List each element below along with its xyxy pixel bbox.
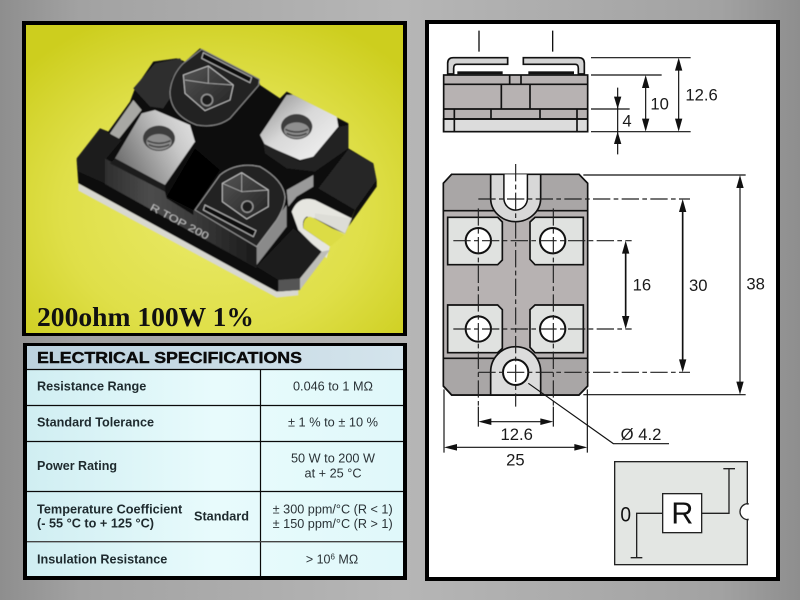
schematic symbol: 0 [620, 502, 631, 526]
terminal: right silver pad [260, 95, 338, 160]
row: temperature coefficient: ± 150 ppm/°C (R > 1) [273, 517, 393, 531]
terminal: bottom hexagon lug [195, 165, 285, 247]
row: insulation resistance: 6 [330, 552, 336, 561]
dimension: side view heights [591, 58, 691, 154]
product caption: 200ohm 100W 1% [37, 301, 254, 332]
row: temperature coefficient: Standard [194, 509, 249, 523]
dimension labels: side view [622, 85, 718, 131]
dimension: overall 38 [583, 175, 765, 395]
row: temperature coefficient: ± 300 ppm/°C (R < 1) [273, 502, 393, 516]
row: temperature coefficient [37, 502, 393, 531]
row: temperature coefficient: Temperature Coefficient [37, 502, 183, 516]
dimension labels: side view: 12.6 [685, 85, 718, 104]
schematic symbol: R [671, 496, 693, 530]
row: insulation resistance [37, 552, 358, 566]
dimension: hole diameter callout: Ø 4.2 [621, 425, 661, 444]
dimension: 12.6 width: 12.6 [500, 425, 533, 444]
drawing: side view [444, 31, 588, 132]
center lines [453, 164, 690, 407]
icon: resistor module photo [77, 48, 377, 298]
panel: mechanical drawing [425, 20, 780, 581]
row: power rating [37, 452, 375, 480]
row: standard tolerance: ± 1 % to ± 10 % [288, 416, 378, 430]
terminal: left silver pad [115, 110, 195, 185]
terminal pads [448, 217, 502, 265]
dimension: hole diameter callout [528, 383, 669, 444]
mounting hook: silver notch [292, 199, 352, 258]
dimension: overall 38: 38 [746, 274, 765, 293]
row: resistance range: 0.046 to 1 MΩ [293, 380, 373, 394]
dimension: 30: 30 [689, 276, 708, 295]
row: resistance range: Resistance Range [37, 380, 146, 394]
dimension: 16 [622, 241, 651, 329]
dimension: 25 width [444, 389, 587, 470]
schematic symbol [615, 462, 749, 565]
dimension: 25 width: 25 [506, 451, 525, 470]
row: resistance range [37, 380, 373, 394]
drawing: top view [443, 174, 588, 395]
panel: electrical specifications table [23, 343, 407, 580]
table heading [27, 346, 403, 369]
row: standard tolerance: Standard Tolerance [37, 416, 154, 430]
row: power rating: 50 W to 200 W [291, 452, 375, 466]
row: power rating: Power Rating [37, 459, 117, 473]
row: power rating: at + 25 °C [304, 466, 362, 480]
dimension labels: side view: 10 [650, 94, 669, 113]
dimension: 16: 16 [633, 276, 651, 295]
row: insulation resistance: Insulation Resistance [37, 552, 167, 566]
dimension labels: side view: 4 [622, 112, 632, 131]
bottom mounting lobe [491, 347, 541, 395]
table heading: ELECTRICAL SPECIFICATIONS [37, 350, 302, 367]
terminal: top hexagon lug [170, 49, 259, 126]
top notch [491, 174, 541, 222]
row: standard tolerance [37, 416, 378, 430]
panel: product photo [22, 21, 407, 336]
row: insulation resistance: MΩ [335, 552, 358, 566]
row: temperature coefficient: (- 55 °C to + 125 °C) [37, 517, 154, 531]
dimension: 12.6 width [478, 407, 553, 444]
row: insulation resistance: > 10 [306, 552, 330, 566]
dimension: 30 [679, 199, 708, 372]
mounting tab: bottom [257, 228, 322, 280]
mounting tab: right [318, 149, 377, 210]
engraved label: R TOP 200 [148, 202, 211, 243]
